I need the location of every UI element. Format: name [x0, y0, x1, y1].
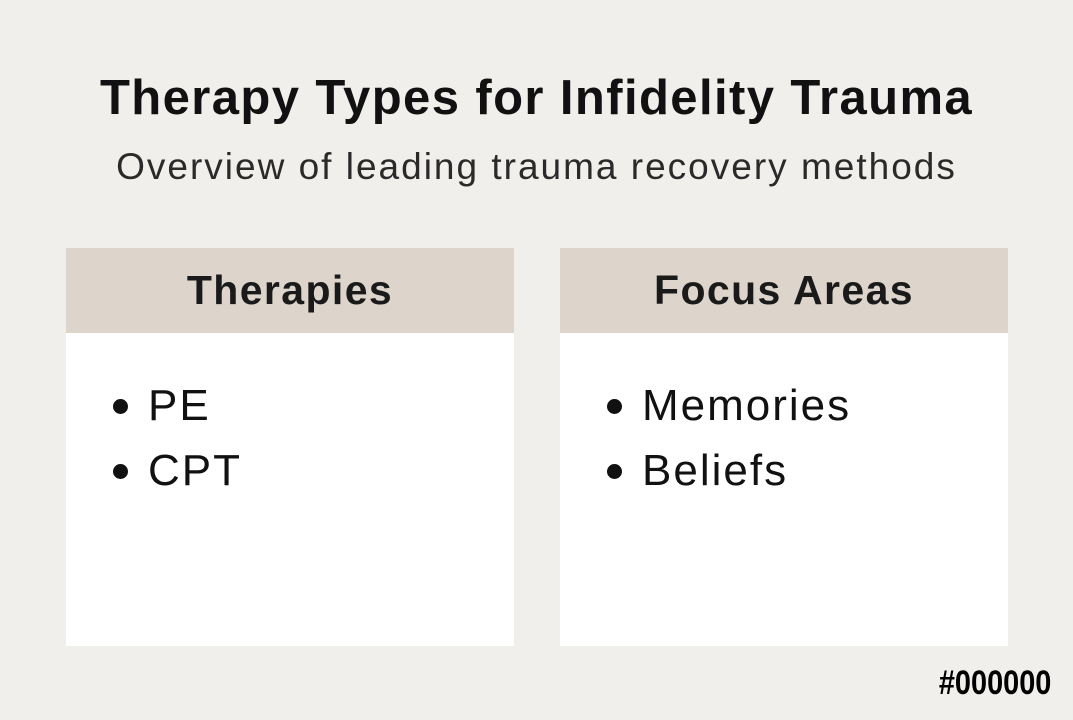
panel heading: focus areas: Focus Areas	[654, 267, 914, 313]
list: therapies	[113, 381, 242, 495]
panel heading: therapies: Therapies	[187, 267, 393, 313]
list: focus areas: Beliefs	[642, 446, 788, 495]
list: therapies: CPT	[148, 446, 242, 495]
panel heading: therapies	[66, 248, 514, 333]
panel heading: focus areas	[560, 248, 1008, 333]
list: therapies: PE	[148, 381, 211, 430]
subtitle: Overview of leading trauma recovery methods	[116, 146, 957, 187]
color tag: #000000	[938, 664, 1051, 702]
title: Therapy Types for Infidelity Trauma	[100, 71, 973, 125]
list: focus areas	[607, 381, 851, 495]
panel: therapies	[66, 248, 514, 646]
panel: focus areas	[560, 248, 1008, 646]
list: focus areas: Memories	[642, 381, 851, 430]
